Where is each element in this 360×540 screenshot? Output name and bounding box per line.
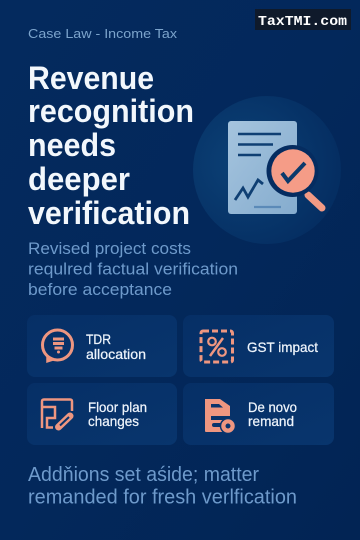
label: remand — [248, 413, 294, 429]
magnifying glass with check — [266, 145, 322, 208]
conclusion text — [28, 464, 297, 508]
icon: document with gear — [205, 399, 236, 434]
subtitle: before acceptance — [28, 280, 172, 299]
title: recognition — [28, 93, 194, 129]
card: De novo remand — [183, 383, 334, 445]
document sheet — [228, 121, 297, 214]
title: Revenue — [28, 60, 154, 96]
illustration: document under magnifying glass — [193, 96, 341, 244]
card: Floor plan changes — [27, 383, 177, 445]
conclusion text: Addňions set aśide; matter — [28, 464, 259, 486]
label: De novo — [248, 399, 297, 415]
label — [248, 399, 297, 429]
label: GST impact — [247, 339, 318, 355]
icon: floor plan with pencil — [42, 400, 72, 428]
label — [86, 331, 146, 362]
title: needs — [28, 127, 116, 163]
title: deeper — [28, 161, 130, 197]
subtitle: requlred factual verification — [28, 260, 238, 278]
card: GST impact — [183, 315, 334, 377]
label: allocation — [86, 346, 146, 362]
label: changes — [88, 413, 139, 429]
label — [88, 399, 147, 429]
label: TDR — [86, 331, 111, 347]
icon: dashed box with percent — [201, 331, 232, 362]
label: Floor plan — [88, 399, 147, 415]
subtitle: Revised project costs — [28, 239, 191, 258]
icon: speech bubble with list — [42, 330, 72, 362]
watermark: TaxTMI.com: TaxTMI.com — [258, 14, 347, 30]
title — [28, 60, 194, 231]
card: TDR allocation — [27, 315, 177, 377]
title: verification — [28, 195, 190, 231]
conclusion text: remanded for fresh verlfication — [28, 486, 297, 508]
watermark: TaxTMI.com — [255, 9, 351, 30]
icon backdrop circle — [193, 96, 341, 244]
subtitle — [28, 239, 238, 299]
eyebrow: case law category: Case Law - Income Tax — [28, 26, 178, 41]
